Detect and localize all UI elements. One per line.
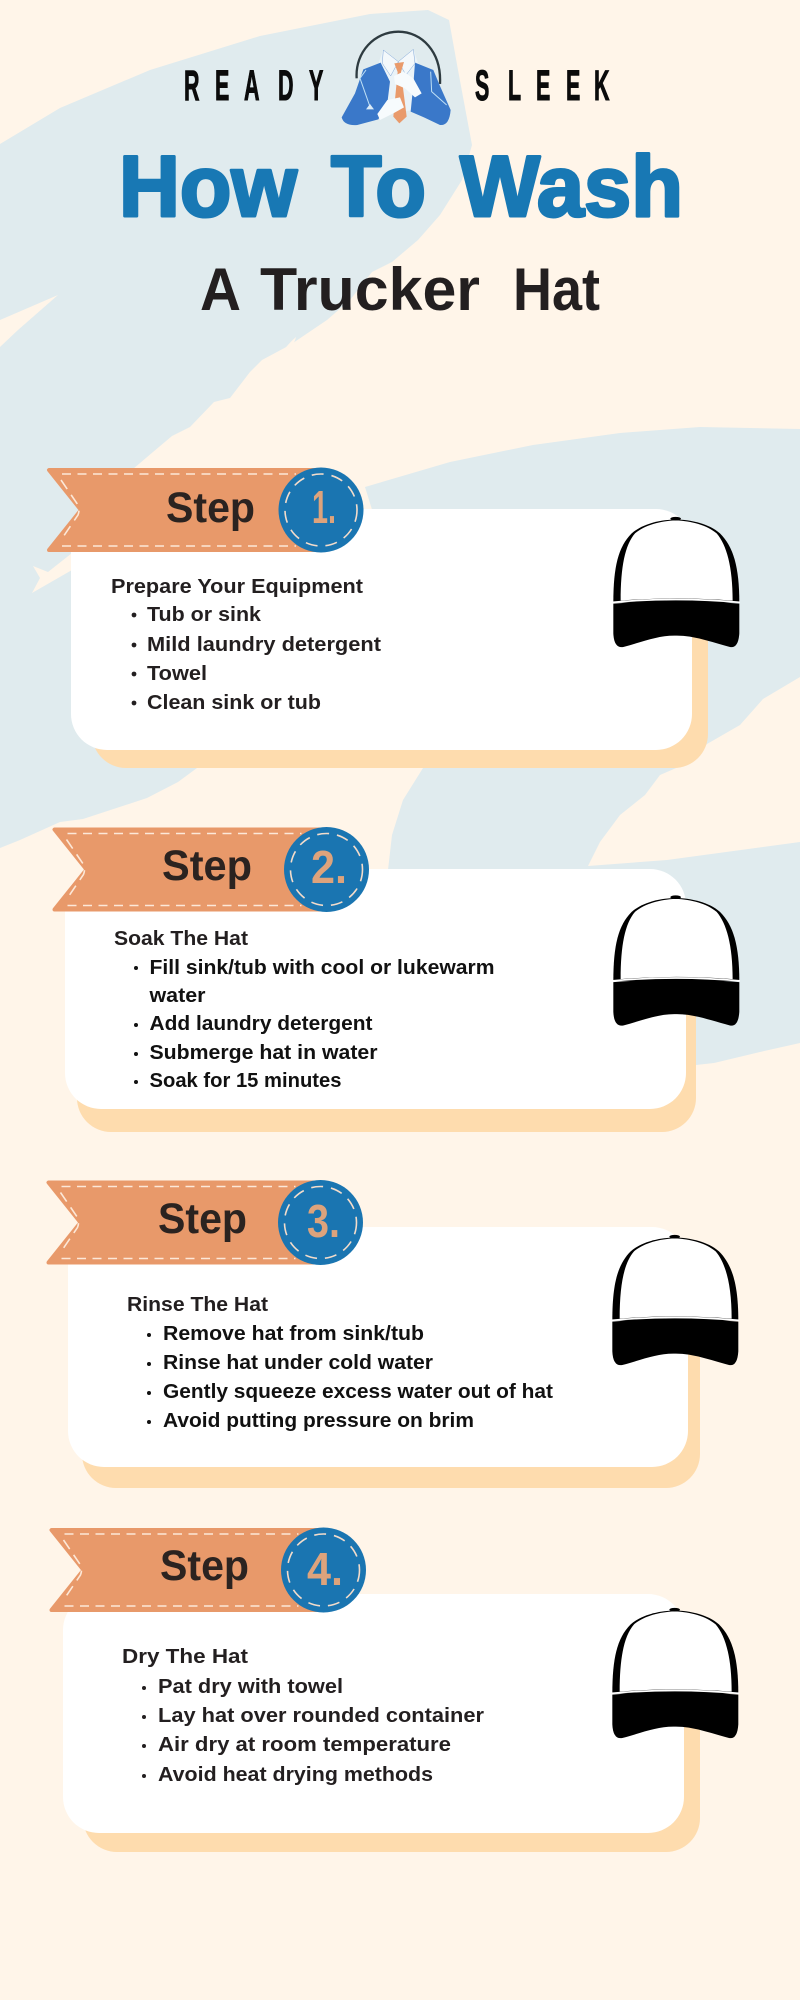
title: How <box>119 139 298 235</box>
subtitle: Hat <box>513 256 600 323</box>
icon: trucker hat <box>613 895 740 1026</box>
panel: step 3 <box>48 1180 739 1488</box>
checklist <box>134 956 494 1092</box>
title: To <box>331 139 426 235</box>
checklist: Clean sink or tub <box>147 691 321 714</box>
step label: Step <box>160 1543 249 1590</box>
panel: step 2 <box>54 827 740 1132</box>
card <box>63 1594 684 1833</box>
checklist: Air dry at room temperature <box>158 1733 451 1756</box>
checklist: Gently squeeze excess water out of hat <box>163 1380 553 1403</box>
step number: 3. <box>307 1195 340 1247</box>
checklist: Mild laundry detergent <box>147 633 381 656</box>
ribbon badge <box>48 1180 363 1265</box>
step label: Step <box>158 1196 247 1243</box>
card shadow <box>92 530 708 768</box>
checklist: Soak for 15 minutes <box>150 1069 342 1092</box>
icon: trucker hat <box>613 517 740 647</box>
subtitle: A <box>200 256 241 323</box>
checklist: Towel <box>147 662 207 685</box>
icon: trucker hat <box>612 1608 739 1738</box>
checklist: Remove hat from sink/tub <box>163 1322 424 1345</box>
checklist: Rinse hat under cold water <box>163 1351 433 1374</box>
card shadow <box>82 1250 700 1488</box>
checklist: Pat dry with towel <box>158 1675 343 1698</box>
heading: Prepare Your Equipment <box>111 575 363 598</box>
heading: Rinse The Hat <box>127 1293 268 1316</box>
panel: step 1 <box>49 468 740 768</box>
checklist: Add laundry detergent <box>150 1012 373 1035</box>
icon: suited figure adjusting tie <box>342 32 451 125</box>
step number: 1. <box>312 481 336 533</box>
subtitle <box>200 256 600 323</box>
checklist: Avoid heat drying methods <box>158 1763 433 1786</box>
ribbon badge <box>54 827 369 912</box>
checklist: Submerge hat in water <box>150 1041 378 1064</box>
ribbon badge <box>52 1528 366 1612</box>
logo wordmark left: READY <box>184 62 324 110</box>
step number: 2. <box>311 841 347 893</box>
ribbon badge <box>49 468 364 552</box>
step label: Step <box>162 843 252 890</box>
title <box>119 139 683 235</box>
logo wordmark right: SLEEK <box>475 62 610 110</box>
checklist: Fill sink/tub with cool or lukewarm <box>150 956 494 979</box>
step number: 4. <box>307 1543 343 1595</box>
subtitle: Trucker <box>260 256 480 323</box>
heading: Soak The Hat <box>114 927 248 950</box>
heading: Dry The Hat <box>122 1645 248 1668</box>
checklist: water <box>148 984 206 1007</box>
checklist: Avoid putting pressure on brim <box>163 1409 474 1432</box>
checklist: Tub or sink <box>147 603 262 626</box>
title: Wash <box>460 139 683 235</box>
checklist <box>142 1675 484 1786</box>
card shadow <box>83 1614 700 1852</box>
background brush strokes <box>0 10 800 1065</box>
logo: Ready Sleek <box>184 32 610 125</box>
checklist: Lay hat over rounded container <box>158 1704 484 1727</box>
icon: trucker hat <box>612 1235 739 1365</box>
card shadow <box>77 890 696 1132</box>
card <box>71 509 692 750</box>
card <box>68 1227 688 1467</box>
panel: step 4 <box>52 1528 739 1852</box>
card <box>65 869 686 1109</box>
checklist <box>147 1322 553 1432</box>
step label: Step <box>166 485 255 532</box>
checklist <box>132 603 381 714</box>
